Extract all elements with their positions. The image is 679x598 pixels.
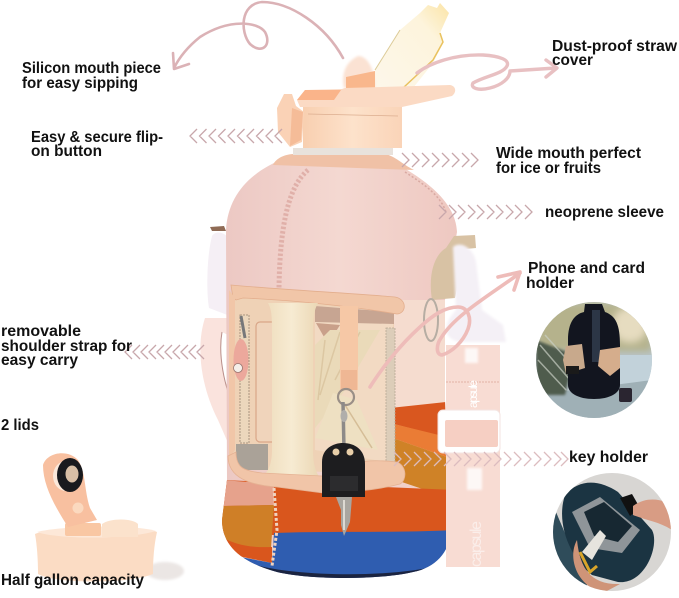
photo: hand using card holder [553, 473, 672, 592]
right strap connector [424, 235, 506, 342]
keys [619, 388, 632, 402]
handle pocket assembly [228, 285, 405, 536]
label: silicon mouth piece: Silicon mouth piece [22, 60, 161, 77]
label: flip-on button: Easy & secure flip- [31, 129, 163, 146]
card [620, 494, 638, 516]
lower sleeve colour bands [222, 300, 460, 585]
label: shoulder strap [1, 323, 132, 369]
label: phone and card holder: Phone and card [528, 260, 645, 277]
sleeve collar [273, 154, 414, 170]
label: 2 lids: 2 lids [1, 417, 39, 434]
arrow: phone and card holder [370, 272, 520, 387]
right shoulder strap with buckle: capsule [468, 521, 485, 567]
cap collar [303, 107, 402, 148]
chevrons: neoprene sleeve [439, 205, 532, 219]
chevrons: shoulder strap [125, 345, 204, 359]
label: flip-on button: on button [31, 143, 102, 160]
right shoulder strap with buckle: apsule [466, 380, 480, 408]
chevrons: flip-on button [190, 129, 282, 143]
label: silicon mouth piece [22, 60, 161, 92]
hand [633, 500, 672, 530]
label: shoulder strap: removable [1, 323, 81, 340]
label: key holder: key holder [569, 449, 648, 466]
bottle [568, 304, 620, 399]
arrow: silicon mouth piece [173, 2, 343, 69]
chevrons: key holder [394, 452, 568, 466]
label: dust-proof straw cover: Dust-proof straw [552, 38, 678, 55]
flip tab with black seal [43, 453, 97, 527]
key ring and clip [338, 389, 354, 450]
keys [582, 530, 606, 560]
label: wide mouth: Wide mouth perfect [496, 145, 642, 162]
handle [263, 303, 320, 478]
label: phone and card holder [526, 260, 645, 292]
top band [231, 285, 404, 314]
silicon mouth piece [343, 56, 375, 88]
label: neoprene sleeve: neoprene sleeve [545, 204, 664, 221]
lid [277, 3, 455, 155]
lid spout ring [102, 520, 138, 537]
flip-on button hinge [277, 94, 304, 147]
photo: black bottle with phone and card [536, 302, 652, 418]
phone [563, 344, 585, 374]
bottle body: neoprene sleeve [222, 154, 460, 585]
label: silicon mouth piece: for easy sipping [22, 75, 138, 92]
label: wide mouth: for ice or fruits [496, 160, 601, 177]
right shoulder strap with buckle [438, 345, 500, 567]
label: shoulder strap: shoulder strap for [1, 338, 132, 355]
straw cover [375, 3, 449, 88]
cap top [297, 85, 455, 107]
black key [322, 443, 365, 536]
second lid [35, 453, 184, 582]
pocket interior [233, 292, 394, 475]
chevrons: wide mouth [402, 153, 478, 167]
label: shoulder strap: easy carry [1, 352, 78, 369]
zipper [234, 315, 249, 443]
elastic cross panel [315, 330, 380, 450]
glass neck [293, 148, 393, 155]
label: half gallon capacity: Half gallon capacity [1, 572, 144, 589]
hinge [65, 523, 101, 536]
left side of pocket frame [229, 290, 235, 458]
arrow: dust-proof straw cover [417, 55, 557, 89]
bottom band [228, 452, 405, 493]
card sleeve [598, 347, 620, 376]
label: dust-proof straw cover [552, 38, 678, 69]
peach key strap [340, 306, 358, 390]
label: wide mouth [496, 145, 642, 177]
label: dust-proof straw cover: cover [552, 52, 593, 69]
left shoulder strap [200, 226, 238, 452]
label: phone and card holder: holder [526, 275, 574, 292]
label: flip-on button [31, 129, 163, 160]
